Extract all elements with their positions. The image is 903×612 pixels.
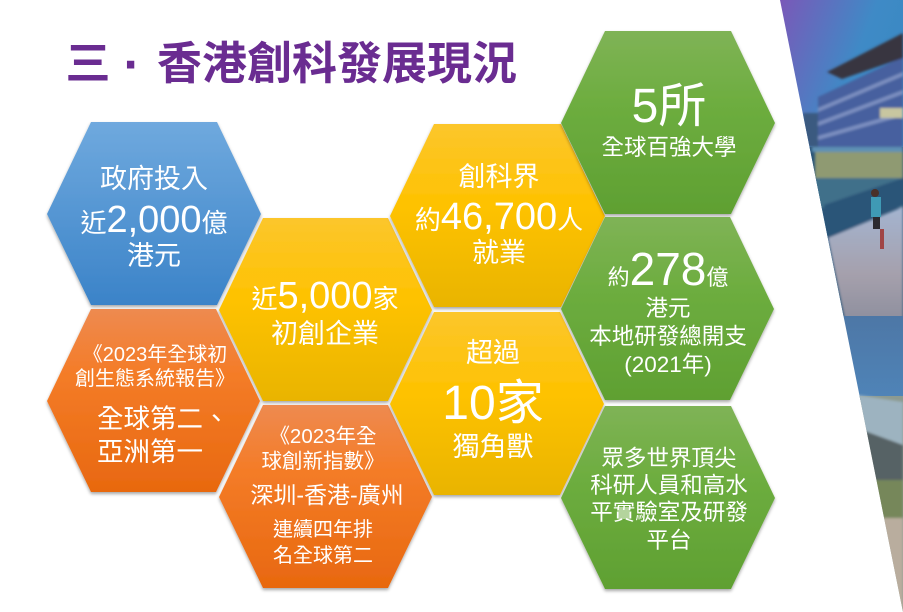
panel: government investment: 政府投入 — [100, 164, 208, 194]
panel: startups: 初創企業 — [271, 319, 379, 349]
panel: talent and labs: 科研人員和高水 — [590, 473, 748, 498]
panel: innovation index: 深圳-香港-廣州 — [250, 482, 404, 508]
panel: startup ecosystem report: 《2023年全球初 — [83, 343, 227, 366]
panel: startups — [219, 218, 432, 401]
panel: startup ecosystem report: 亞洲第一 — [97, 437, 203, 467]
panel: talent and labs: 平實驗室及研發 — [590, 500, 748, 525]
panel: top universities: 5所 — [632, 80, 706, 133]
upper photo: sky — [780, 0, 903, 316]
panel: employment: 就業 — [472, 238, 526, 268]
panel: innovation index: 《2023年全 — [269, 425, 377, 448]
panel: R&D expenditure: (2021年) — [624, 352, 712, 377]
panel: R&D expenditure: 約278億 — [608, 243, 728, 295]
panel: R&D expenditure: 本地研發總開支 — [589, 324, 747, 349]
panel: talent and labs — [561, 406, 775, 589]
panel: startup ecosystem report — [47, 309, 260, 492]
panel: startup ecosystem report: 全球第二、 — [97, 404, 230, 434]
title: 三 — [65, 38, 111, 89]
panel: startup ecosystem report: 創生態系統報告》 — [75, 367, 235, 390]
panel: government investment: 港元 — [127, 241, 181, 271]
panel: unicorns: 10家 — [442, 377, 544, 430]
panel: employment: 約46,700人 — [415, 196, 583, 238]
panel: government investment — [47, 122, 261, 305]
upper photo: building — [803, 33, 903, 320]
panel: startups: 近5,000家 — [251, 275, 399, 317]
panel: unicorns: 超過 — [466, 338, 520, 368]
panel: top universities: 全球百強大學 — [601, 135, 737, 160]
panel: R&D expenditure: 港元 — [645, 296, 691, 321]
upper photo: runner — [871, 189, 884, 249]
panel: talent and labs: 眾多世界頂尖 — [601, 446, 737, 471]
title: 香港創科發展現況 — [157, 38, 517, 89]
panel: innovation index: 名全球第二 — [273, 544, 373, 567]
title: · — [123, 36, 141, 94]
panel: talent and labs: 平台 — [646, 528, 692, 553]
panel: employment: 創科界 — [458, 162, 540, 192]
panel: unicorns — [390, 312, 604, 495]
panel: R&D expenditure — [561, 217, 774, 400]
panel: innovation index: 連續四年排 — [273, 518, 373, 541]
panel: innovation index: 球創新指數》 — [262, 450, 384, 473]
photo strip: campus buildings — [780, 0, 903, 612]
lower photo: building and trees — [858, 395, 903, 612]
panel: government investment: 近2,000億 — [80, 199, 228, 241]
panel: unicorns: 獨角獸 — [452, 432, 534, 462]
panel: innovation index — [219, 405, 432, 588]
panel: employment — [390, 124, 605, 307]
lower photo: sky — [844, 316, 903, 400]
panel: top universities — [561, 31, 775, 214]
